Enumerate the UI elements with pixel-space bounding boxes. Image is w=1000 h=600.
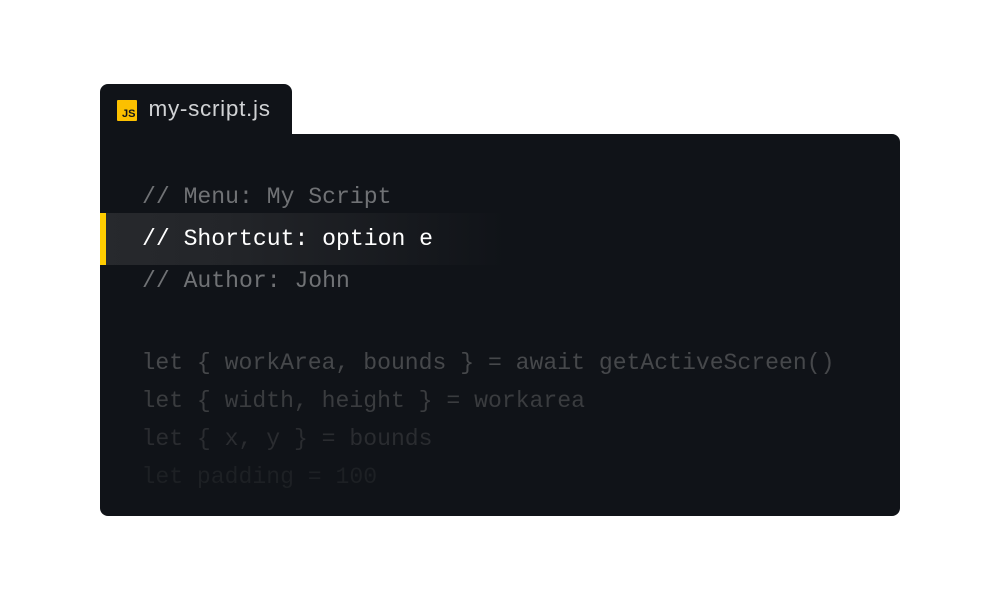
code line: x and y: let { x, y } = bounds xyxy=(142,426,433,452)
file name: my-script.js xyxy=(148,96,271,121)
code line: menu comment: // Menu: My Script xyxy=(142,184,391,210)
icon: JS file badge xyxy=(117,100,137,121)
JS badge label: JS xyxy=(122,108,136,120)
code line: active screen: let { workArea, bounds } = await getActiveScreen() xyxy=(142,350,834,376)
code panel xyxy=(100,134,900,516)
highlighted line background xyxy=(106,213,506,265)
code line: author comment: // Author: John xyxy=(142,268,350,294)
code line: shortcut comment: // Shortcut: option e xyxy=(142,226,433,252)
code line: width and height: let { width, height } = workarea xyxy=(142,388,585,414)
highlight accent bar xyxy=(100,213,106,265)
file tab xyxy=(100,84,292,135)
code line: padding: let padding = 100 xyxy=(142,464,377,490)
